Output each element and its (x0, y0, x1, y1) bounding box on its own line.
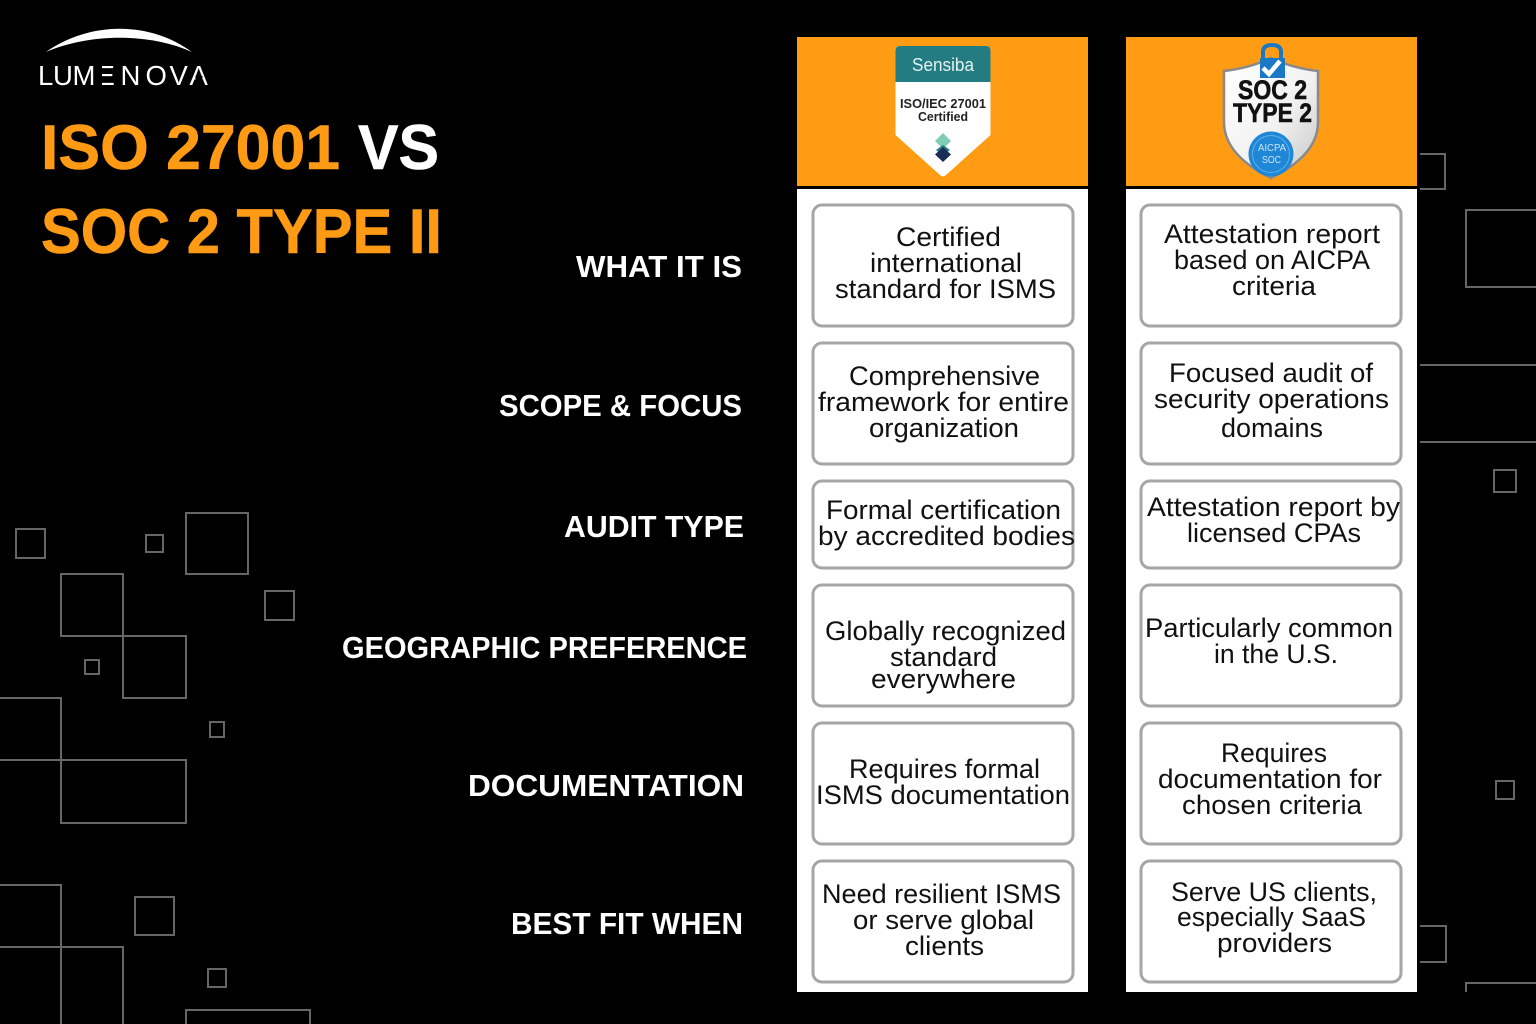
card: ISO best fit when: or serve global (853, 905, 1034, 935)
icon: SOC 2 Type 2 shield badge: SOC 2 (1238, 75, 1307, 105)
card: SOC best fit when (1141, 861, 1401, 982)
card: ISO what it is (813, 205, 1073, 326)
title (41, 113, 442, 267)
title: VS (358, 113, 439, 183)
icon: SOC 2 Type 2 shield badge: AICPA (1258, 143, 1286, 154)
card: SOC documentation: chosen criteria (1182, 790, 1363, 820)
card: SOC documentation: documentation for (1158, 764, 1382, 794)
row label: what it is: WHAT IT IS (576, 249, 742, 284)
card: SOC best fit when: especially SaaS (1177, 902, 1366, 932)
card: ISO best fit when (813, 861, 1073, 982)
icon: Sensiba ISO/IEC 27001 badge: ISO/IEC 27001 (900, 96, 986, 111)
panel: ISO 27001 column (797, 37, 1088, 992)
card: ISO best fit when: clients (905, 931, 984, 961)
card: ISO scope and focus: organization (869, 413, 1019, 443)
card: ISO audit type (813, 481, 1075, 568)
card: ISO geographic preference: everywhere (871, 664, 1016, 694)
icon: SOC 2 Type 2 shield badge: TYPE 2 (1233, 98, 1312, 128)
card: SOC what it is: based on AICPA (1174, 245, 1370, 275)
card: ISO geographic preference (813, 585, 1073, 706)
card: SOC documentation: Requires (1221, 738, 1327, 768)
card: SOC audit type: Attestation report by (1147, 492, 1401, 522)
card: SOC scope and focus: domains (1221, 413, 1323, 443)
card: SOC audit type: licensed CPAs (1187, 518, 1361, 548)
icon: Sensiba ISO/IEC 27001 badge: Sensiba (912, 55, 975, 75)
card: ISO geographic preference: Globally recognized (825, 616, 1066, 646)
card: SOC geographic preference (1141, 585, 1401, 706)
logo: Lumenova: LUMENOVA (38, 60, 208, 91)
card: ISO scope and focus (813, 343, 1073, 464)
icon: SOC 2 Type 2 shield badge: SOC (1262, 155, 1281, 166)
card: ISO documentation: Requires formal (849, 754, 1040, 784)
card: SOC audit type (1141, 481, 1401, 568)
row label: audit type: AUDIT TYPE (564, 509, 744, 544)
icon: SOC 2 Type 2 shield badge (1224, 45, 1318, 178)
title: ISO 27001 (41, 113, 340, 183)
card: ISO geographic preference: standard (890, 642, 997, 672)
card: SOC scope and focus: Focused audit of (1169, 358, 1373, 388)
row label: geographic preference: GEOGRAPHIC PREFERENCE (342, 630, 747, 665)
card: SOC best fit when: Serve US clients, (1171, 877, 1377, 907)
card: ISO audit type: by accredited bodies (818, 521, 1075, 551)
card: SOC geographic preference: in the U.S. (1214, 639, 1338, 669)
card: SOC best fit when: providers (1217, 928, 1332, 958)
logo: Lumenova (38, 29, 208, 91)
header: SOC 2 orange band (1126, 37, 1417, 186)
card: ISO documentation: ISMS documentation (816, 780, 1070, 810)
card: ISO scope and focus: framework for entire (818, 387, 1069, 417)
card: ISO documentation (813, 723, 1073, 844)
panel: SOC 2 column (1126, 37, 1417, 992)
icon: Sensiba ISO/IEC 27001 badge (896, 46, 990, 176)
card: SOC scope and focus (1141, 343, 1401, 464)
card: SOC what it is: criteria (1232, 271, 1317, 301)
card: SOC documentation (1141, 723, 1401, 844)
card: SOC what it is: Attestation report (1164, 219, 1381, 249)
card: SOC scope and focus: security operations (1154, 384, 1389, 414)
icon: Sensiba ISO/IEC 27001 badge: Certified (918, 110, 968, 124)
card: ISO what it is: international (870, 248, 1022, 278)
card: SOC what it is (1141, 205, 1401, 326)
card: SOC geographic preference: Particularly common (1145, 613, 1393, 643)
card: ISO what it is: Certified (896, 222, 1001, 252)
row label: scope and focus: SCOPE & FOCUS (499, 388, 742, 423)
row label: best fit when: BEST FIT WHEN (511, 906, 743, 941)
card: ISO what it is: standard for ISMS (835, 274, 1056, 304)
row label: documentation: DOCUMENTATION (468, 768, 744, 803)
title: SOC 2 TYPE II (41, 197, 442, 267)
card: ISO best fit when: Need resilient ISMS (822, 879, 1061, 909)
card: ISO scope and focus: Comprehensive (849, 361, 1040, 391)
card: ISO audit type: Formal certification (826, 495, 1061, 525)
header: ISO 27001 orange band (797, 37, 1088, 186)
